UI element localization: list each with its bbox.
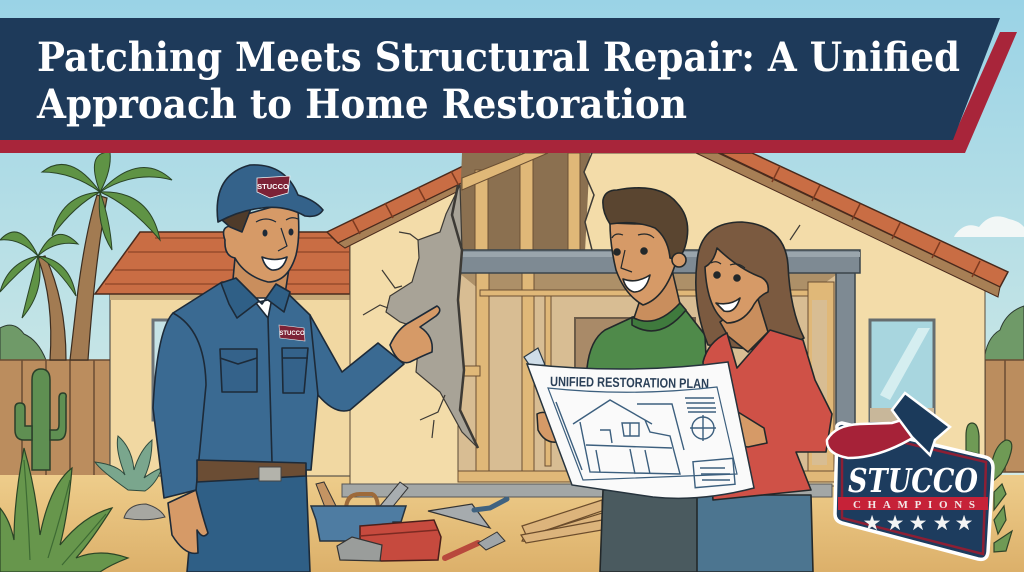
logo stars: ★ <box>955 512 973 535</box>
logo swoosh <box>827 418 916 458</box>
restoration plan blueprint <box>524 348 754 498</box>
right side window <box>870 320 934 422</box>
worker mouth <box>262 257 287 270</box>
logo subtitle: CHAMPIONS <box>853 499 975 511</box>
collar <box>221 278 290 318</box>
small agave <box>95 436 162 491</box>
chest pockets <box>220 348 308 393</box>
trowel <box>428 499 507 528</box>
main house gable roof <box>327 153 1008 297</box>
worker <box>153 165 440 572</box>
worker trousers <box>187 470 310 572</box>
palm trees <box>0 152 172 360</box>
chest badge: STUCCO <box>279 331 305 337</box>
worker left arm <box>153 313 206 498</box>
background bushes <box>0 306 1024 362</box>
homeowner man <box>587 188 708 572</box>
worker left hand <box>168 490 208 553</box>
exposed structural framing <box>342 153 860 497</box>
logo stars: ★ <box>886 512 904 535</box>
logo stars: ★ <box>863 512 881 535</box>
logo red band <box>838 497 988 510</box>
putty knife <box>445 532 505 558</box>
cloud <box>954 216 1024 237</box>
logo shield <box>835 423 993 559</box>
logo stars <box>863 512 973 535</box>
worker hair <box>222 206 252 232</box>
white undershirt <box>252 298 272 318</box>
logo wordmark: STUCCO <box>848 461 978 500</box>
left cactus <box>15 369 66 470</box>
banner navy panel <box>0 18 1000 140</box>
homeowner woman <box>696 222 832 572</box>
paper roll <box>524 348 545 366</box>
banner red accent <box>0 32 1017 153</box>
plan drawing frame <box>548 387 737 480</box>
logo stars: ★ <box>909 512 927 535</box>
logo stars: ★ <box>933 512 951 535</box>
plan heading: UNIFIED RESTORATION PLAN <box>550 374 709 391</box>
main house wall <box>350 153 985 486</box>
worker pointing hand <box>390 306 440 363</box>
worker face <box>224 200 299 282</box>
logo-side cacti <box>966 423 1012 552</box>
cracked stucco patch <box>363 153 800 448</box>
wooden fences <box>0 360 1024 482</box>
worker torso <box>173 282 322 470</box>
worker neck <box>232 258 290 306</box>
logo trowel <box>892 393 950 455</box>
title banner <box>0 18 1017 153</box>
toolbox and tools <box>311 482 441 561</box>
cap badge <box>257 176 290 198</box>
belt buckle <box>259 467 281 481</box>
Stucco Champions logo <box>827 393 993 559</box>
house drawing <box>556 398 735 488</box>
worker eyes <box>262 228 294 236</box>
man's holding hand <box>537 412 562 442</box>
rock <box>124 504 165 520</box>
sandy ground <box>0 475 1024 572</box>
cap badge: STUCCO <box>257 182 289 191</box>
title: Approach to Home Restoration <box>36 81 687 128</box>
chest badge <box>279 325 305 341</box>
title: Patching Meets Structural Repair: A Unified <box>37 34 960 81</box>
cap <box>217 165 323 222</box>
foreground agave <box>0 448 128 572</box>
woman's holding hand <box>720 412 767 447</box>
lumber stack <box>521 500 602 543</box>
left house <box>95 232 350 476</box>
belt <box>197 460 306 482</box>
worker right arm <box>310 315 404 411</box>
paper sheet <box>527 362 754 498</box>
